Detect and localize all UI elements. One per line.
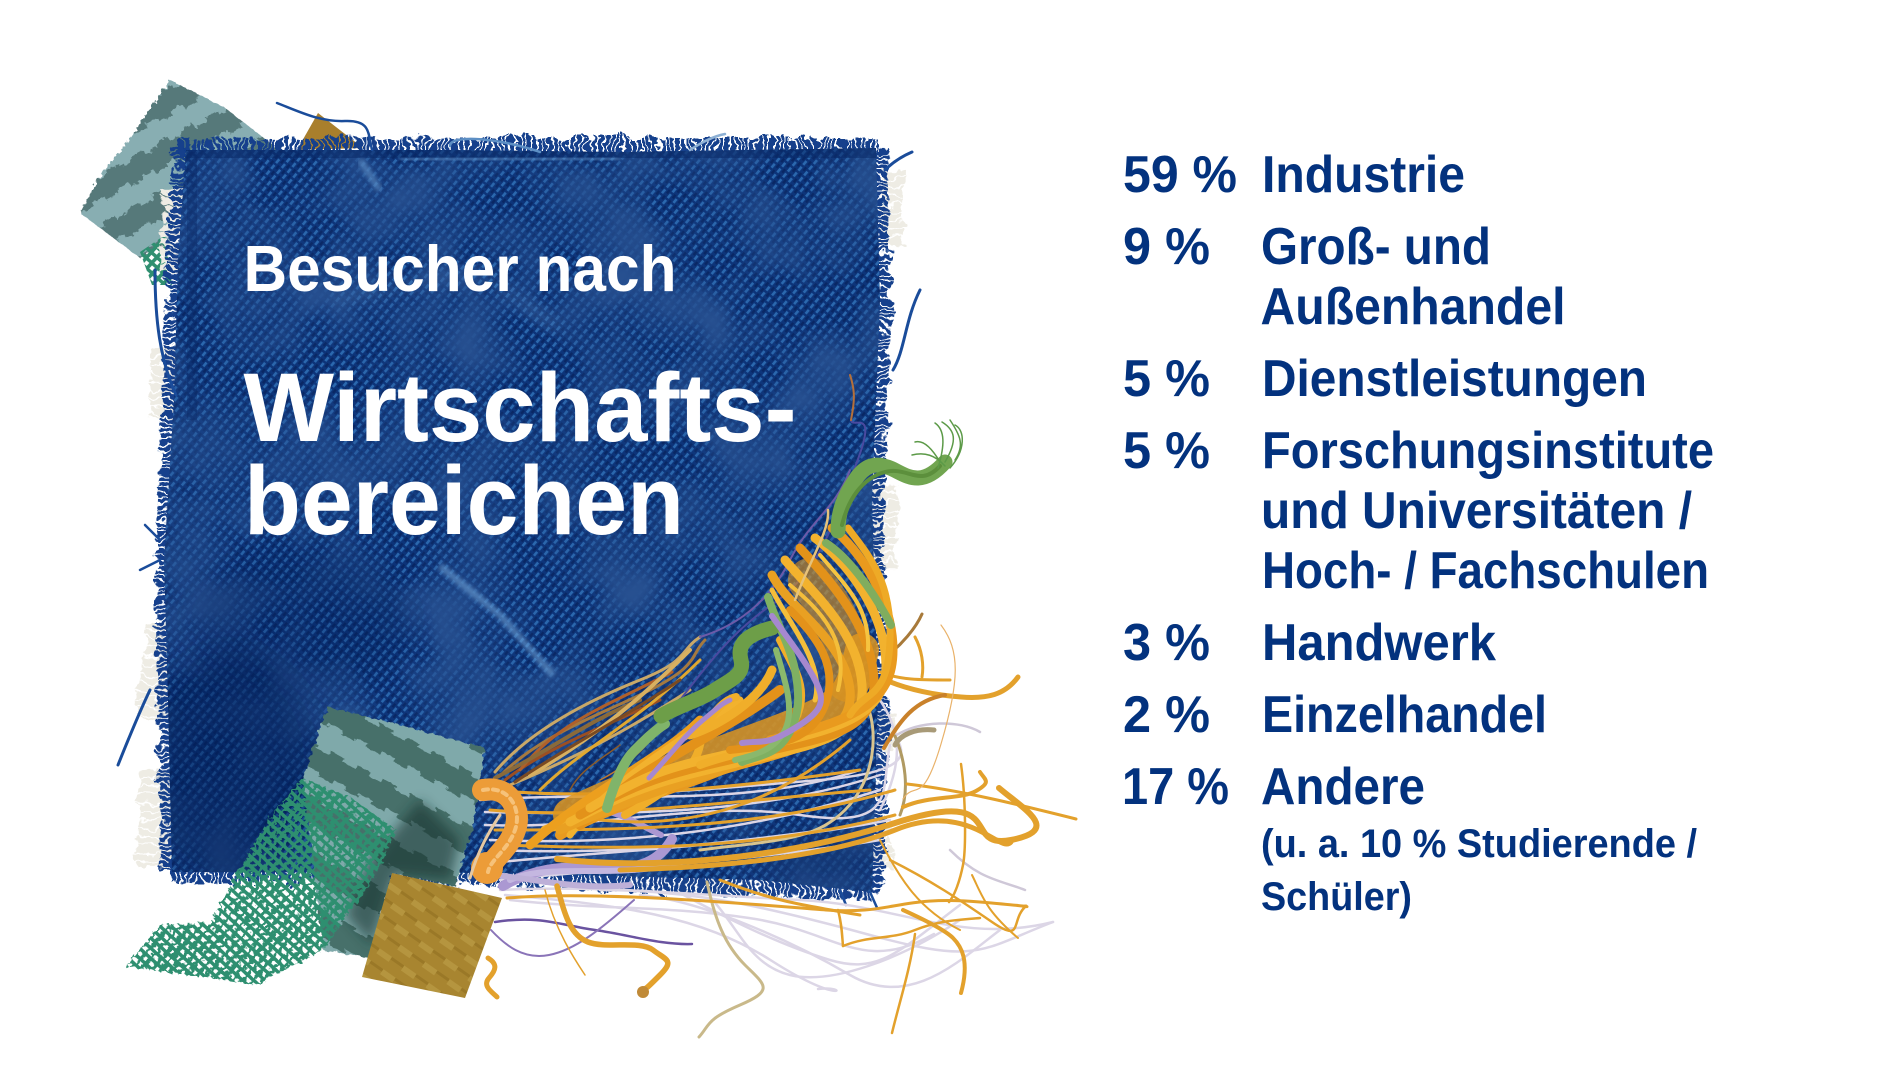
row: 5 % Forschungsinstitute: Hoch- / Fachschulen <box>1262 542 1709 600</box>
row: 17 % Andere <box>1122 758 1697 919</box>
fabric scrap: teal carbon top left <box>80 80 285 285</box>
loose denim threads <box>118 103 920 910</box>
row: 5 % Dienstleistungen: 5 % <box>1123 350 1210 408</box>
shadow on carbon scrap <box>345 800 460 945</box>
green frayed tip <box>912 420 962 468</box>
row: 2 % Einzelhandel: 2 % <box>1123 686 1210 744</box>
row: 3 % Handwerk <box>1123 614 1496 672</box>
fabric scrap: small gold top <box>297 113 363 150</box>
row: 3 % Handwerk: 3 % <box>1123 614 1210 672</box>
row: 59 % Industrie: Industrie <box>1262 146 1465 204</box>
row: 17 % Andere: Schüler) <box>1261 875 1412 919</box>
row: 17 % Andere: Andere <box>1261 758 1425 816</box>
row: 9 % Groß- und Außenhandel <box>1123 218 1566 336</box>
heading <box>244 232 796 555</box>
row: 5 % Dienstleistungen <box>1123 350 1647 408</box>
lilac bands and purple threads <box>491 810 692 956</box>
thin orange threads <box>487 614 1076 1033</box>
infographic canvas <box>80 80 1712 1039</box>
row: 9 % Groß- und Außenhandel: 9 % <box>1123 218 1210 276</box>
list of visitor shares <box>1122 146 1714 919</box>
wire bundle <box>470 375 1076 1037</box>
purple accent strands <box>649 616 821 778</box>
fabric scrap: teal carbon bottom left <box>303 707 485 958</box>
row: 3 % Handwerk: Handwerk <box>1262 614 1496 672</box>
small green mesh corner <box>140 235 172 285</box>
row: 5 % Forschungsinstitute: und Universitäten / <box>1261 482 1692 540</box>
row: 59 % Industrie <box>1123 146 1465 204</box>
heading line: Besucher nach: Besucher nach <box>244 232 676 305</box>
heading line: Wirtschafts-: Wirtschafts- <box>244 353 796 462</box>
row: 2 % Einzelhandel: Einzelhandel <box>1262 686 1547 744</box>
row: 5 % Forschungsinstitute <box>1123 422 1714 600</box>
white fringe of denim patch <box>152 170 892 868</box>
row: 17 % Andere: 17 % <box>1122 758 1229 816</box>
fabric scrap: green mesh <box>125 778 397 985</box>
main orange strands <box>530 510 893 845</box>
brown thread bundle <box>495 637 705 790</box>
green strands and rope <box>607 462 945 808</box>
fine pale threads <box>480 700 1053 991</box>
row: 2 % Einzelhandel <box>1123 686 1547 744</box>
row: 5 % Forschungsinstitute: Forschungsinstitute <box>1262 422 1714 480</box>
row: 9 % Groß- und Außenhandel: Außenhandel <box>1260 278 1566 336</box>
heading line: bereichen: bereichen <box>244 446 684 555</box>
orange knitted end <box>470 789 517 884</box>
knot on thread end <box>637 986 649 998</box>
blue fringe of denim patch <box>166 148 880 890</box>
frayed edge of denim patch <box>152 148 892 890</box>
row: 5 % Forschungsinstitute: 5 % <box>1123 422 1210 480</box>
woven denim surface <box>140 130 900 900</box>
row: 17 % Andere: (u. a. 10 % Studierende / <box>1261 822 1697 866</box>
thin dark blue thread <box>660 375 865 725</box>
denim collage illustration <box>80 80 1076 1037</box>
row: 59 % Industrie: 59 % <box>1123 146 1237 204</box>
row: 9 % Groß- und Außenhandel: Groß- und <box>1261 218 1491 276</box>
beige threads <box>699 700 934 1037</box>
fabric scrap: large gold <box>362 873 502 998</box>
row: 5 % Dienstleistungen: Dienstleistungen <box>1262 350 1647 408</box>
